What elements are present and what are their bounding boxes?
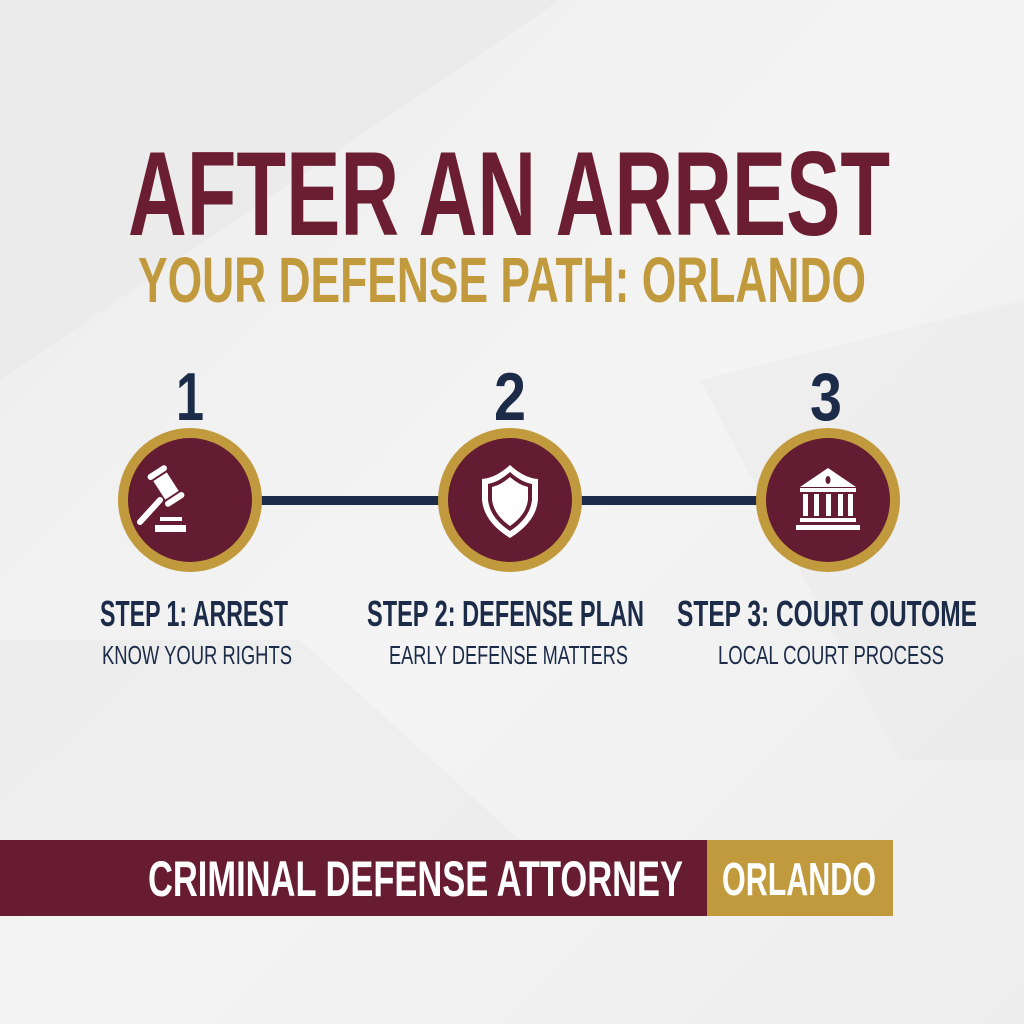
step 1 label: STEP 1: ARREST — [100, 593, 288, 634]
step 2 label: STEP 2: DEFENSE PLAN — [367, 593, 644, 634]
icon: courthouse — [756, 428, 900, 572]
connector line — [255, 496, 775, 505]
icon: shield — [438, 428, 582, 572]
step 3 — [677, 359, 977, 670]
banner location: ORLANDO — [722, 853, 876, 905]
icon: gavel — [118, 428, 262, 572]
number 2: 2 — [494, 359, 526, 435]
banner — [0, 840, 893, 916]
step 1 — [100, 359, 292, 670]
step 2 — [367, 359, 644, 670]
step 1 description: KNOW YOUR RIGHTS — [102, 640, 292, 670]
number 3: 3 — [810, 359, 842, 435]
step 2 description: EARLY DEFENSE MATTERS — [389, 640, 628, 670]
number 1: 1 — [176, 359, 204, 435]
banner text: CRIMINAL DEFENSE ATTORNEY — [148, 851, 683, 907]
